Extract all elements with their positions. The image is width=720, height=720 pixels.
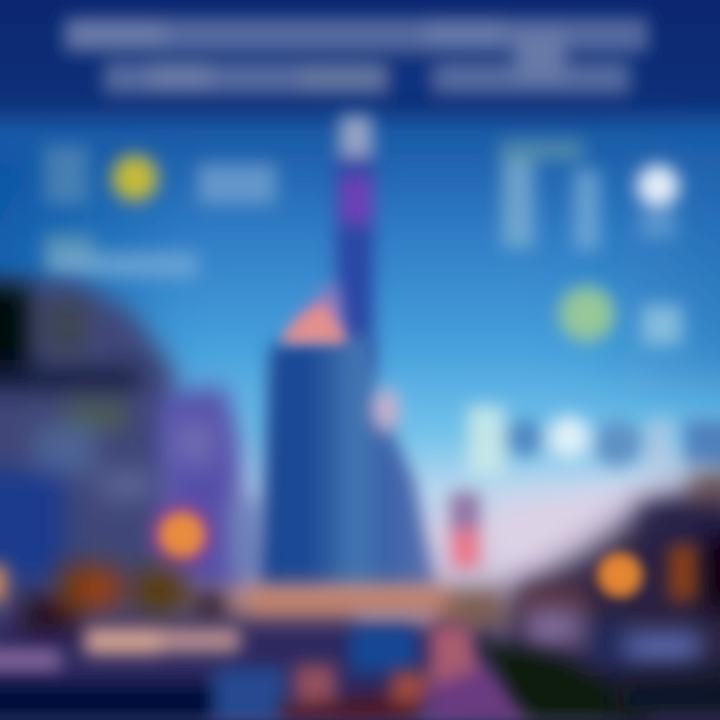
large building [0, 280, 180, 620]
dark right building [480, 480, 720, 720]
icon: white circle [637, 165, 679, 207]
text block: upper-left label [44, 146, 88, 204]
lower-right dark ground [610, 670, 720, 720]
text block: green icon caption [642, 305, 682, 345]
tower peach dome [280, 304, 348, 342]
street lights [0, 612, 435, 670]
lower-left dark road [0, 668, 285, 720]
panel: upper-left stats [44, 146, 276, 278]
orange glow halo [152, 505, 212, 565]
building details [0, 285, 260, 580]
small red tower [450, 492, 480, 568]
icon: blue circle [594, 420, 642, 468]
panel: middle-right stat [559, 286, 682, 345]
purple building [160, 385, 250, 590]
text block: column two [574, 170, 600, 250]
central blue block [350, 626, 416, 672]
icon: pale bar [648, 420, 672, 476]
orange glow [160, 513, 204, 557]
warm street band [20, 565, 505, 632]
text block: column one [502, 160, 534, 248]
panel: upper-right stats [500, 140, 679, 250]
tower dome lilac [285, 280, 345, 340]
text block: icon caption [640, 212, 676, 238]
right blue lights [525, 610, 700, 670]
right building cluster [480, 475, 720, 720]
left edge glow [0, 565, 6, 601]
main tower [258, 116, 436, 590]
icon: white circle [548, 416, 590, 458]
panel: lower-right icon row [468, 406, 720, 476]
right orange glow [598, 553, 642, 597]
street and ground [0, 565, 720, 720]
lower-right green lawn [478, 640, 650, 720]
pale horizon haze [490, 470, 720, 580]
tower side highlight [372, 388, 400, 432]
right brown glow [670, 545, 696, 600]
icon: pale green figure [468, 406, 504, 476]
icon: green circle [559, 286, 615, 342]
ground base [0, 610, 500, 720]
pink pavement [280, 625, 530, 720]
title: blurred heading lines [64, 18, 648, 96]
text block: lower-left caption [50, 252, 198, 278]
icon: right blue shape [684, 420, 720, 466]
text block: column heading [500, 140, 584, 160]
icon: dark blue circle [505, 419, 543, 457]
left building cluster [0, 280, 260, 620]
tower spire [336, 116, 374, 370]
text block: upper-middle label [198, 164, 276, 204]
tower lower body [258, 335, 436, 590]
right building detail [520, 475, 720, 620]
text block: lower-left label [44, 234, 94, 270]
icon: yellow sun [112, 155, 158, 201]
